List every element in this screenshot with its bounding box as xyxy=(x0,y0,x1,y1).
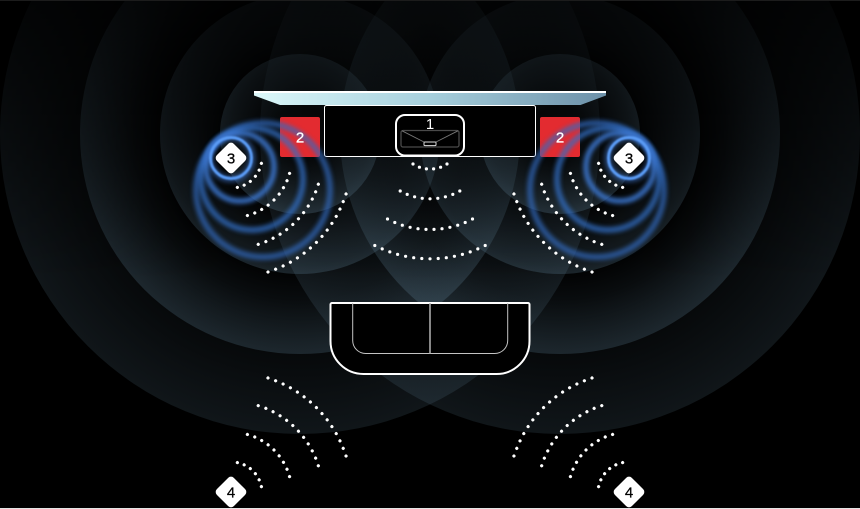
marker 4 left xyxy=(214,475,248,509)
label 2 right: 2 xyxy=(556,130,564,146)
center speaker console xyxy=(324,106,536,156)
dotted waves: rear right xyxy=(505,369,650,509)
marker 4 right xyxy=(612,475,646,509)
dotted waves: front right xyxy=(505,136,650,281)
marker 3 left: 3 xyxy=(227,150,235,168)
speaker 1 xyxy=(396,115,464,156)
blue rings left xyxy=(196,123,330,257)
blue rings right xyxy=(530,123,664,257)
speaker 2 left box xyxy=(280,117,320,157)
screen / shelf xyxy=(254,92,606,105)
dotted waves: front left xyxy=(210,136,355,281)
dotted waves: rear left xyxy=(210,369,355,509)
label 2 left: 2 xyxy=(296,130,304,146)
marker 4 right: 4 xyxy=(625,484,633,502)
dotted waves: center xyxy=(375,164,485,259)
speaker 2 right box xyxy=(540,117,580,157)
marker 3 right: 3 xyxy=(625,150,633,168)
marker 3 left xyxy=(214,141,248,175)
speaker 1: 1 xyxy=(426,116,434,133)
marker 3 right xyxy=(612,141,646,175)
marker 4 left: 4 xyxy=(227,484,235,502)
sofa xyxy=(330,303,530,374)
